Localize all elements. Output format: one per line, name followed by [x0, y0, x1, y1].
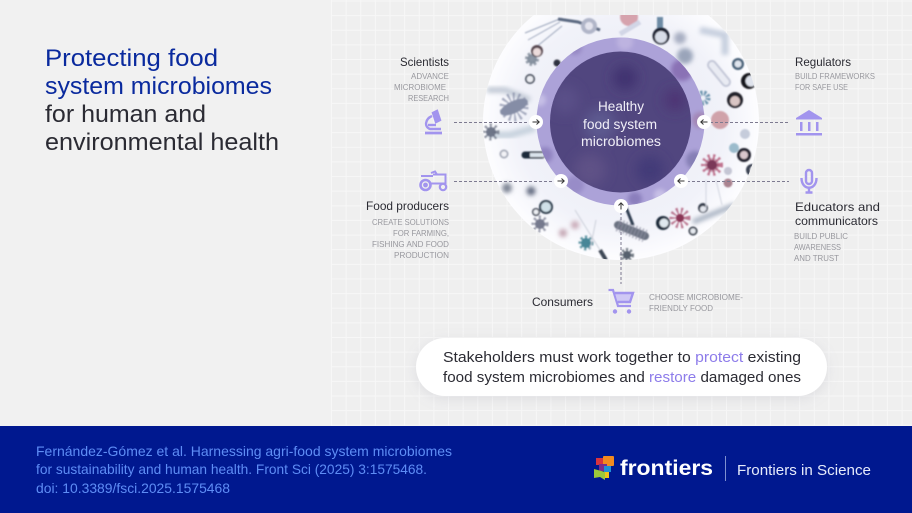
title: environmental health [45, 129, 279, 156]
stakeholder: regulators [795, 55, 875, 136]
arrow: regulators [697, 115, 711, 129]
stakeholder: educators and communicators: AND TRUST [794, 253, 839, 263]
logo: frontiers: frontiers [620, 457, 713, 480]
stakeholder: scientists: ADVANCE [411, 71, 449, 81]
citation: doi: 10.3389/fsci.2025.1575468 [36, 480, 230, 496]
stakeholder: regulators: BUILD FRAMEWORKS [795, 71, 875, 81]
stakeholder: scientists: Scientists [400, 55, 449, 69]
arrow: consumers [614, 199, 628, 213]
footer band [0, 426, 912, 513]
stakeholder: scientists [394, 55, 449, 133]
icon: shopping cart [608, 290, 633, 314]
logo: frontiers [594, 456, 871, 481]
stakeholder: consumers: Consumers [532, 295, 593, 309]
arrow: scientists [529, 115, 543, 129]
connector lines [454, 122, 789, 284]
stakeholder: consumers [532, 290, 743, 314]
stakeholder: food producers: PRODUCTION [394, 250, 449, 260]
stakeholder: scientists: RESEARCH [408, 93, 449, 103]
stakeholder: food producers: Food producers [366, 199, 449, 213]
icon: tractor [420, 172, 446, 190]
stakeholder: regulators: FOR SAFE USE [795, 82, 848, 92]
stakeholder: consumers: CHOOSE MICROBIOME- [649, 292, 743, 302]
icon: frontiers mark [594, 456, 614, 480]
stakeholder: food producers: FISHING AND FOOD [372, 239, 449, 249]
citation: Fernández-Gómez et al. Harnessing agri-food system microbiomes [36, 443, 452, 459]
arrow: educators [674, 174, 688, 188]
stakeholder: consumers: FRIENDLY FOOD [649, 303, 713, 313]
icon: microscope [425, 111, 442, 133]
stakeholder: food producers: CREATE SOLUTIONS [372, 217, 449, 227]
microbes [486, 8, 758, 260]
arrow: food producers [554, 174, 568, 188]
icon: microphone [802, 170, 816, 193]
stakeholder: regulators: Regulators [795, 55, 851, 69]
central ring [534, 34, 708, 206]
stakeholder: food producers [366, 172, 449, 260]
title: system microbiomes [45, 73, 272, 100]
icon: bank [796, 110, 822, 136]
stakeholder: food producers: FOR FARMING, [393, 228, 449, 238]
central label: microbiomes [581, 134, 661, 149]
stakeholder: scientists: MICROBIOME [394, 82, 446, 92]
callout: Stakeholders must work together to protect existing [443, 349, 801, 366]
stakeholder: educators and communicators: BUILD PUBLIC [794, 231, 848, 241]
central label [581, 99, 661, 149]
logo: frontiers: Frontiers in Science [737, 462, 871, 479]
stakeholder: educators and communicators [794, 170, 880, 263]
citation: for sustainability and human health. Front Sci (2025) 3:1575468. [36, 461, 427, 477]
central circle [550, 52, 691, 192]
title [45, 45, 279, 156]
title: for human and [45, 101, 206, 128]
callout [416, 338, 827, 396]
central label: Healthy [598, 99, 644, 114]
title: Protecting food [45, 45, 218, 72]
citation [36, 443, 452, 496]
stakeholder: educators and communicators: communicators [795, 214, 878, 228]
callout: food system microbiomes and restore damaged ones [443, 369, 801, 386]
stakeholder: educators and communicators: AWARENESS [794, 242, 841, 252]
microbiome image disc [483, 0, 759, 260]
stakeholder: educators and communicators: Educators and [795, 200, 880, 214]
central label: food system [583, 117, 657, 132]
